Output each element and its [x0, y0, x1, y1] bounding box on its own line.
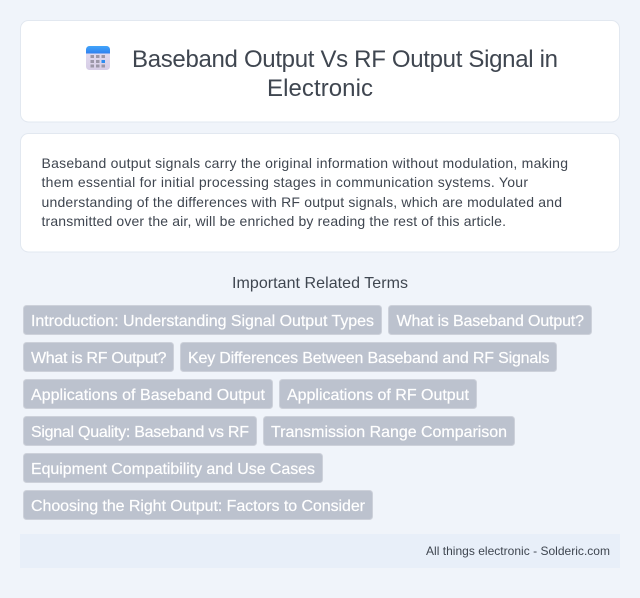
- title: Electronic: [267, 75, 373, 102]
- tag: Choosing the Right Output: Factors to Consider: [31, 498, 366, 515]
- tag: [24, 416, 256, 446]
- tag: [280, 380, 476, 408]
- tag: [24, 380, 272, 408]
- tag: [388, 306, 592, 334]
- tag: Applications of Baseband Output: [31, 387, 266, 404]
- intro paragraph: [42, 155, 568, 229]
- title: [132, 46, 558, 102]
- tag: Applications of RF Output: [287, 387, 470, 404]
- tag: Transmission Range Comparison: [271, 424, 507, 441]
- tag: [24, 306, 382, 334]
- tag: Equipment Compatibility and Use Cases: [31, 461, 315, 478]
- intro paragraph: Baseband output signals carry the original information without modulation, making: [42, 155, 568, 171]
- title panel: [20, 20, 620, 122]
- tag: [24, 342, 174, 372]
- tag: [24, 490, 372, 520]
- footer bar: [20, 534, 620, 568]
- tag: What is Baseband Output?: [396, 313, 584, 330]
- tag: Introduction: Understanding Signal Output Types: [31, 313, 374, 330]
- tag: Key Differences Between Baseband and RF Signals: [188, 350, 550, 367]
- intro paragraph: them essential for initial processing stages in communication systems. Your: [42, 174, 528, 190]
- intro paragraph: understanding of the differences with RF output signals, which are modulated and: [42, 194, 562, 210]
- tag: [264, 416, 514, 446]
- title: Baseband Output Vs RF Output Signal in: [132, 46, 558, 73]
- tag: What is RF Output?: [31, 350, 167, 367]
- tag: Signal Quality: Baseband vs RF: [31, 424, 249, 441]
- intro text panel: [20, 134, 620, 252]
- tag: [24, 454, 322, 482]
- footer credit: All things electronic - Solderic.com: [426, 544, 610, 558]
- intro paragraph: transmitted over the air, will be enriched by reading the rest of this article.: [42, 213, 506, 229]
- section heading: Important Related Terms: [232, 275, 408, 292]
- tag: [180, 342, 556, 372]
- tag list: [24, 306, 592, 520]
- icon: calendar: [86, 46, 110, 70]
